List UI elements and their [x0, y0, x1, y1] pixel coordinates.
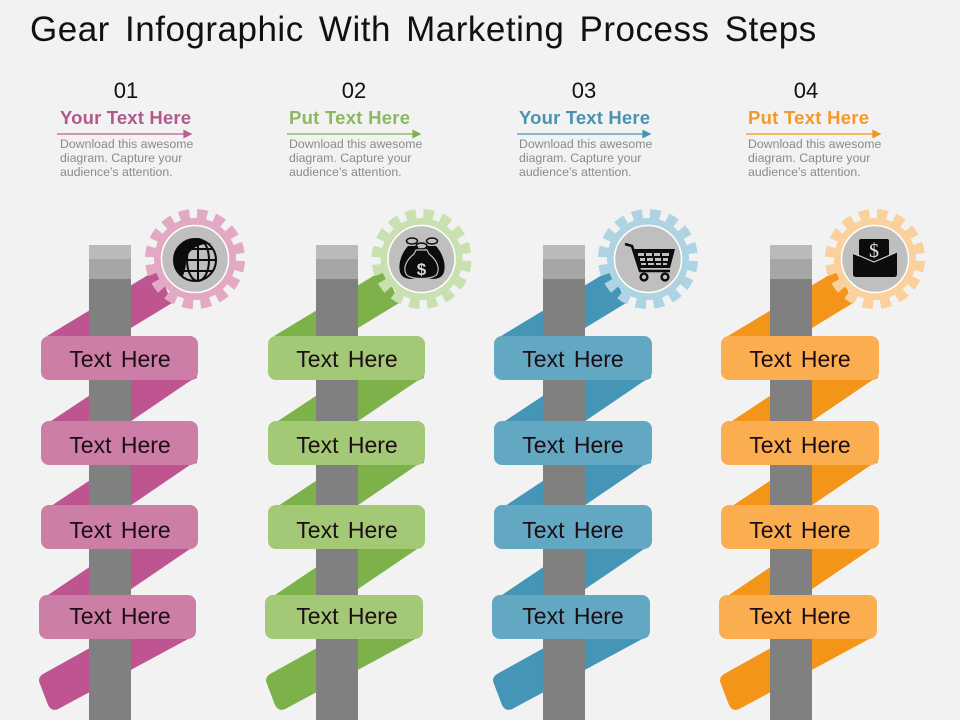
text card 4: [719, 595, 877, 639]
ribbon: [720, 269, 878, 710]
icon: money bags: $: [417, 260, 427, 279]
pole: [316, 245, 358, 720]
gear with shopping cart icon: [590, 201, 706, 317]
text card 1: Text Here: [296, 346, 398, 372]
icon: globe: [174, 239, 216, 281]
gear with money bags icon: [364, 201, 479, 317]
step number 01: 01: [114, 78, 138, 103]
text card 3: [41, 505, 198, 549]
text card 2: [494, 421, 652, 465]
ribbon: [39, 269, 197, 710]
panel: step 02: [265, 78, 479, 720]
pole: [543, 245, 585, 720]
text card 2: Text Here: [749, 432, 851, 458]
text card 2: [721, 421, 879, 465]
icon: envelope with dollar: $: [869, 240, 879, 262]
text card 1: [268, 336, 425, 380]
step 01 header: [57, 78, 193, 179]
text card 3: [721, 505, 879, 549]
text card 2: Text Here: [69, 432, 171, 458]
text card 4: [265, 595, 423, 639]
description: diagram. Capture your: [748, 151, 870, 165]
arrow: [746, 130, 880, 138]
text card 4: Text Here: [296, 603, 398, 629]
text card 4: Text Here: [522, 603, 624, 629]
step heading: Put Text Here: [289, 107, 410, 128]
step heading: Your Text Here: [60, 107, 191, 128]
text card 2: Text Here: [522, 432, 624, 458]
description: Download this awesome: [748, 137, 881, 151]
step number 02: 02: [342, 78, 366, 103]
arrow: [287, 130, 420, 138]
icon: shopping cart: [625, 244, 675, 280]
text card 4: Text Here: [69, 603, 171, 629]
step 02 header: [287, 78, 422, 179]
text card 4: Text Here: [749, 603, 851, 629]
panel: step 01: [39, 78, 253, 720]
gear with envelope icon: [817, 201, 933, 317]
text card 1: [494, 336, 652, 380]
description: audience’s attention.: [519, 165, 632, 179]
text card 1: [721, 336, 879, 380]
ribbon: [493, 269, 651, 710]
text card 3: [494, 505, 652, 549]
text card 4: [39, 595, 196, 639]
text card 2: [268, 421, 425, 465]
step number 04: 04: [794, 78, 818, 103]
text card 1: Text Here: [69, 346, 171, 372]
text card 3: Text Here: [749, 517, 851, 543]
step number 03: 03: [572, 78, 596, 103]
description: Download this awesome: [519, 137, 652, 151]
ribbon: [266, 269, 424, 710]
description: Download this awesome: [60, 137, 193, 151]
description: audience’s attention.: [60, 165, 173, 179]
text card 4: [492, 595, 650, 639]
gear with globe icon: [137, 201, 253, 317]
step 04 header: [746, 78, 881, 179]
panel: step 03: [492, 78, 706, 720]
text card 1: [41, 336, 198, 380]
text card 2: [41, 421, 198, 465]
pole: [89, 245, 131, 720]
arrow: [517, 130, 650, 138]
text card 1: Text Here: [522, 346, 624, 372]
panel: step 04: [719, 78, 933, 720]
description: diagram. Capture your: [289, 151, 411, 165]
text card 1: Text Here: [749, 346, 851, 372]
text card 3: Text Here: [69, 517, 171, 543]
title: Gear Infographic With Marketing Process Steps: [30, 10, 817, 49]
text card 2: Text Here: [296, 432, 398, 458]
text card 3: [268, 505, 425, 549]
description: Download this awesome: [289, 137, 422, 151]
arrow: [57, 130, 191, 138]
pole: [770, 245, 812, 720]
description: audience’s attention.: [289, 165, 402, 179]
step 03 header: [517, 78, 652, 179]
description: diagram. Capture your: [60, 151, 182, 165]
text card 3: Text Here: [522, 517, 624, 543]
description: audience’s attention.: [748, 165, 861, 179]
step heading: Your Text Here: [519, 107, 650, 128]
text card 3: Text Here: [296, 517, 398, 543]
description: diagram. Capture your: [519, 151, 641, 165]
step heading: Put Text Here: [748, 107, 869, 128]
